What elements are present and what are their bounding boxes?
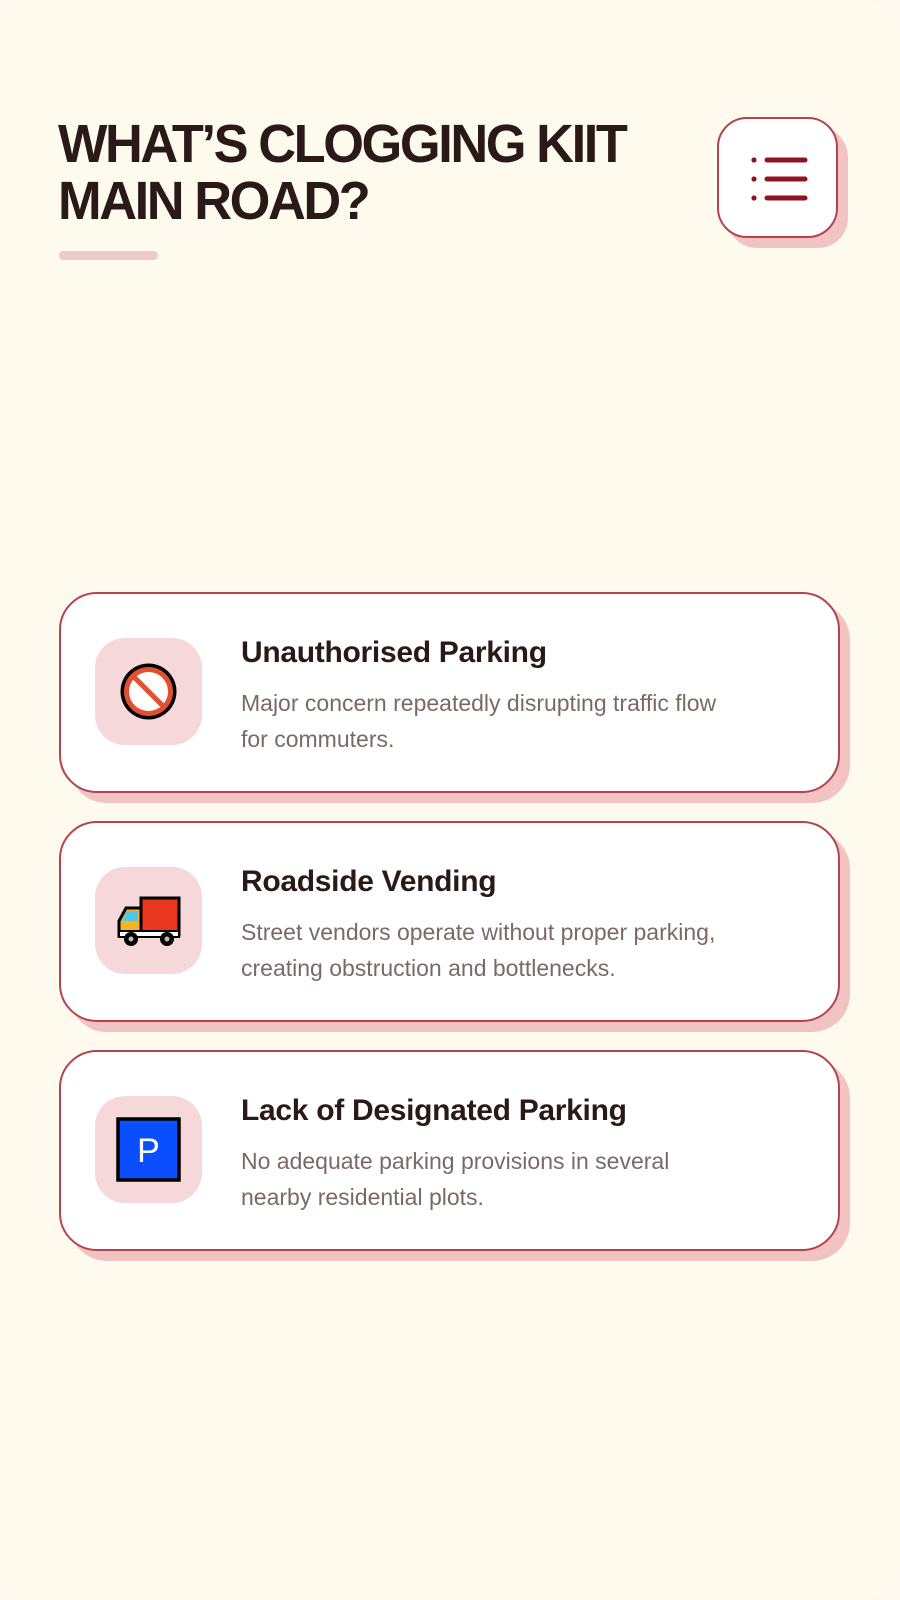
title underline accent — [59, 251, 158, 260]
title: MAIN ROAD? — [58, 171, 368, 231]
title: WHAT’S CLOGGING KIIT — [58, 114, 625, 174]
panel: unauthorised parking — [59, 592, 850, 803]
icon: prohibited sign — [95, 638, 202, 745]
title — [58, 114, 628, 231]
description: Street vendors operate without proper parking, creating obstruction and bottlenecks. — [241, 919, 715, 981]
description: No adequate parking provisions in several nearby residential plots. — [241, 1148, 669, 1210]
icon: truck — [95, 867, 202, 974]
panel: lack of designated parking — [59, 1050, 850, 1261]
icon: list menu — [717, 117, 848, 248]
icon: parking sign: P — [137, 1132, 160, 1170]
heading: Roadside Vending — [241, 865, 496, 898]
panel: roadside vending — [59, 821, 850, 1032]
heading: Unauthorised Parking — [241, 636, 547, 669]
icon: parking sign — [95, 1096, 202, 1203]
heading: Lack of Designated Parking — [241, 1094, 627, 1127]
description: Major concern repeatedly disrupting traffic flow for commuters. — [241, 690, 716, 752]
